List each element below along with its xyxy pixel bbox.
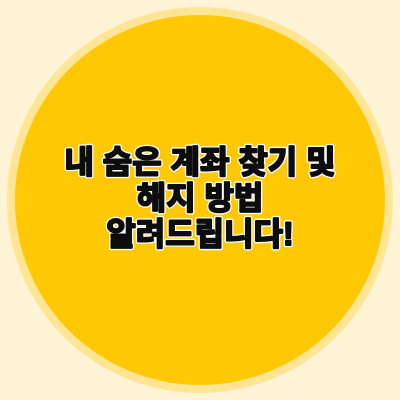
title: 해지 방법 — [137, 180, 263, 216]
title: 내 숨은 계좌 찾기 및 — [64, 144, 336, 180]
title — [64, 144, 336, 252]
title: 해지 방법 — [137, 180, 263, 216]
title: 내 숨은 계좌 찾기 및 — [64, 144, 336, 180]
title: 알려드립니다! — [106, 216, 294, 252]
title: 알려드립니다! — [106, 216, 294, 252]
